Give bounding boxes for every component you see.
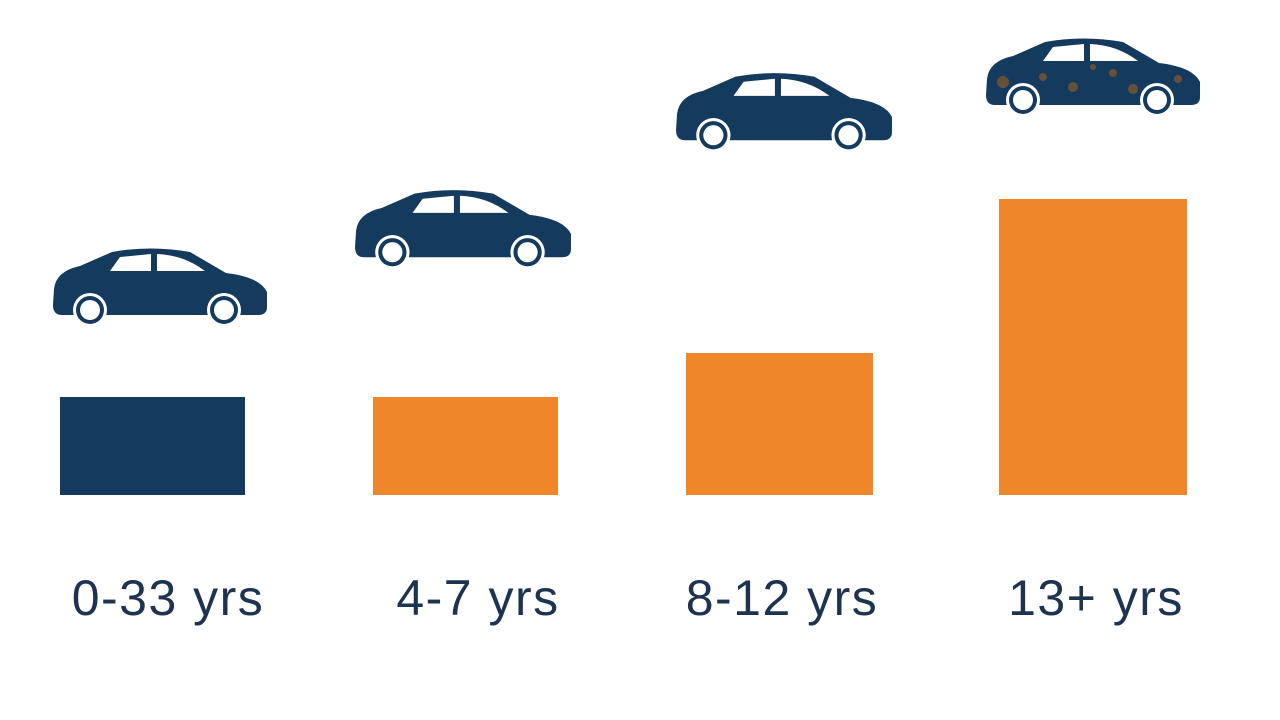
- bar: 0-3 yrs: [60, 397, 245, 495]
- icon: car 0-3 yrs: [53, 248, 267, 324]
- bar: 8-12 yrs: [686, 353, 873, 495]
- icon: rusty car 13+ yrs: [986, 38, 1200, 114]
- label: 13+ yrs: 13+ yrs: [1008, 570, 1184, 626]
- icon: car 8-12 yrs: [676, 73, 892, 150]
- icon: car 4-7 yrs: [355, 190, 571, 266]
- label: 8-12 yrs: 8-12 yrs: [686, 570, 878, 626]
- bar: 13+ yrs: [999, 199, 1187, 495]
- bar: 4-7 yrs: [373, 397, 558, 495]
- label: 4-7 yrs: 4-7 yrs: [396, 570, 560, 626]
- label: 0-33 yrs: 0-33 yrs: [72, 570, 264, 626]
